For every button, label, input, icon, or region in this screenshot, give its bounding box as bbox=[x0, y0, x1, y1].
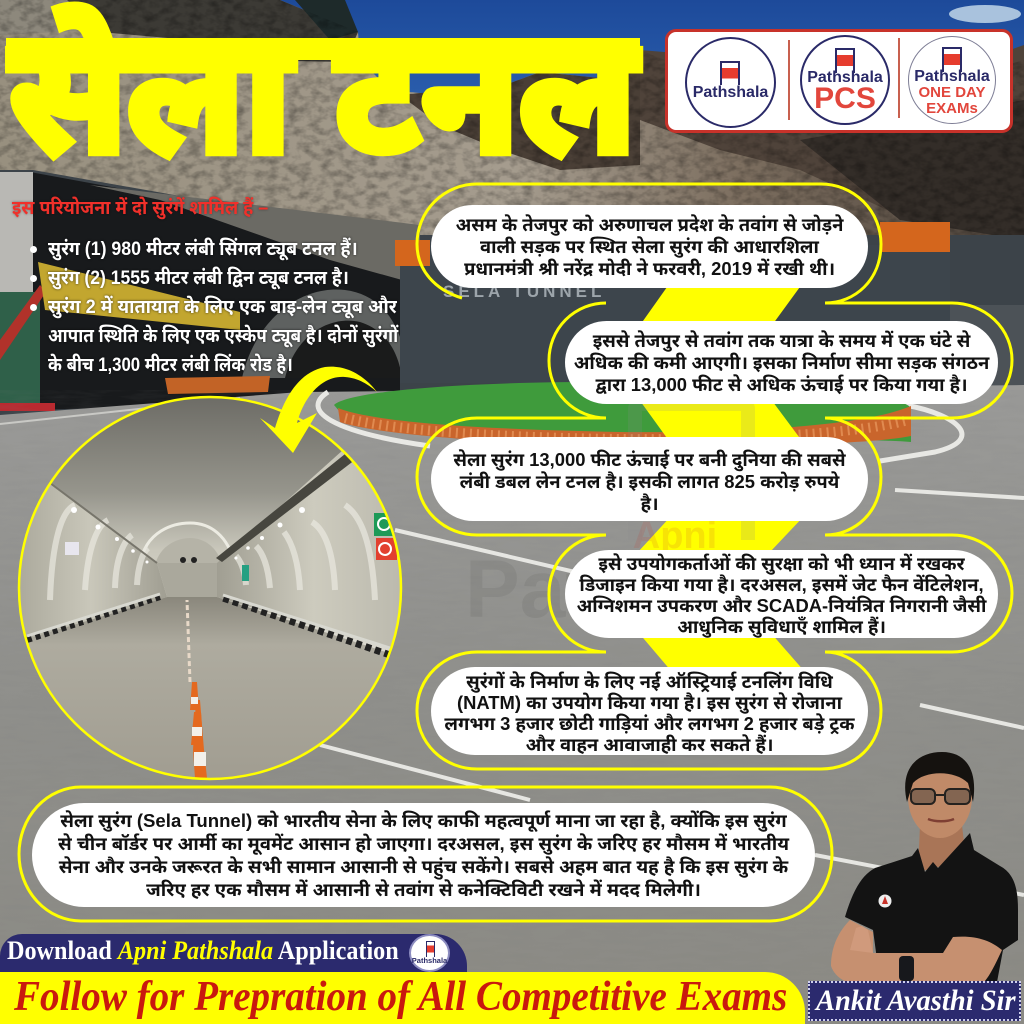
presenter name: Ankit Avasthi Sir bbox=[816, 984, 1016, 1017]
one day exams label: ONE DAY bbox=[919, 84, 985, 101]
one day exams label: EXAMs bbox=[926, 100, 978, 117]
title text: सेला टनल bbox=[10, 6, 636, 187]
bubble 5: (NATM) का उपयोग किया गया है। इस सुरंग से रोजाना bbox=[457, 692, 842, 713]
phone icon bbox=[835, 48, 855, 73]
wordmark: Pathshala bbox=[807, 69, 883, 86]
phone icon bbox=[720, 61, 740, 85]
bullet 3: के बीच 1,300 मीटर लंबी लिंक रोड है। bbox=[48, 354, 293, 376]
sign text on tunnel: SELA TUNNEL bbox=[443, 282, 605, 301]
phone bbox=[426, 941, 435, 957]
divider bbox=[788, 40, 790, 120]
bubble 6: जरिए हर एक मौसम में आसानी से तवांग से कनेक्टिविटी रखने में मदद मिलेगी। bbox=[146, 879, 701, 900]
bubble 6: से चीन बॉर्डर पर आर्मी का मूवमेंट आसान हो जाएगा। दरअसल, इस सुरंग के जरिए हर मौसम में भारतीय bbox=[58, 833, 789, 854]
bubble 3: सेला सुरंग 13,000 फीट ऊंचाई पर बनी दुनिया की सबसे bbox=[453, 449, 846, 470]
follow bar bbox=[0, 972, 805, 1024]
app logo bbox=[409, 934, 450, 972]
bubble 1: असम के तेजपुर को अरुणाचल प्रदेश के तवांग से जोड़ने bbox=[456, 214, 843, 234]
divider bbox=[898, 38, 900, 118]
bubble 2 bbox=[565, 321, 998, 404]
title bbox=[5, 2, 644, 187]
bubble 1: वाली सड़क पर स्थित सेला सुरंग की आधारशिला bbox=[480, 236, 819, 256]
bullet 1: सुरंग (1) 980 मीटर लंबी सिंगल ट्यूब टनल हैं। bbox=[48, 238, 358, 260]
bubble 6 bbox=[32, 803, 815, 907]
bubble 1 bbox=[431, 205, 868, 288]
bubble 5 bbox=[431, 667, 868, 755]
bubble 2: द्वारा 13,000 फीट से अधिक ऊंचाई पर किया गया है। bbox=[596, 374, 967, 394]
one day exams label bbox=[919, 84, 986, 117]
follow text: Follow for Prepration of All Competitive Exams bbox=[14, 974, 787, 1020]
download text: Download Apni Pathshala Application bbox=[7, 936, 399, 965]
bubble 3: है। bbox=[641, 493, 658, 514]
bubble 5: लगभग 3 हजार छोटी गाड़ियां और लगभग 2 हजार बड़े ट्रक bbox=[444, 713, 855, 734]
bubble 3: लंबी डबल लेन टनल है। इसकी लागत 825 करोड़ रुपये bbox=[460, 471, 839, 492]
watermark text: Pathshala bbox=[465, 544, 852, 635]
bubble 1: प्रधानमंत्री श्री नरेंद्र मोदी ने फरवरी, 2019 में रखी थी। bbox=[464, 258, 835, 278]
bubble 4: आधुनिक सुविधाएँ शामिल हैं। bbox=[677, 616, 886, 637]
logo: Pathshala One Day Exams bbox=[908, 36, 996, 124]
bubble 5: सुरंगों के निर्माण के लिए नई ऑस्ट्रियाई टनलिंग विधि bbox=[466, 671, 833, 692]
download application bar bbox=[0, 934, 467, 972]
bubble 4: डिजाइन किया गया है। दरअसल, इसमें जेट फैन वेंटिलेशन, bbox=[579, 574, 984, 595]
wordmark: Pathshala bbox=[914, 68, 990, 85]
bubble 2: अधिक की कमी आएगी। इसका निर्माण सीमा सड़क संगठन bbox=[574, 352, 989, 372]
bubble 4: अग्निशमन उपकरण और SCADA-नियंत्रित निगरानी जैसी bbox=[577, 595, 986, 616]
road bbox=[0, 385, 1024, 1024]
PCS label: PCS bbox=[814, 82, 876, 115]
bullet 3: आपात स्थिति के लिए एक एस्केप ट्यूब है। दोनों सुरंगों bbox=[48, 325, 398, 347]
bubble 4 bbox=[565, 550, 998, 638]
bubble 6: सेना और उनके जरूरत के सभी सामान आसानी से पहुंच सकेंगे। सबसे अहम बात यह है कि इस सुरंग के bbox=[59, 856, 788, 877]
label: Pathshala bbox=[412, 956, 447, 965]
watermark logo bbox=[628, 404, 755, 557]
bubble 5: और वाहन आवाजाही कर सकते हैं। bbox=[526, 734, 773, 755]
bullet 2: सुरंग (2) 1555 मीटर लंबी द्विन ट्यूब टनल है। bbox=[48, 267, 349, 289]
grass traffic island bbox=[318, 382, 962, 461]
logo: Pathshala PCS bbox=[800, 35, 890, 125]
logo panel bbox=[665, 29, 1013, 133]
wordmark: Pathshala bbox=[693, 84, 768, 101]
phone icon bbox=[942, 47, 962, 72]
tunnel portal bbox=[0, 170, 1024, 420]
bubble 6: सेला सुरंग (Sela Tunnel) को भारतीय सेना के लिए काफी महत्वपूर्ण माना जा रहा है, क्योंकि इस सुरंग bbox=[60, 810, 787, 831]
list heading: इस परियोजना में दो सुरंगें शामिल हैं – bbox=[12, 198, 268, 219]
watermark wordmark: Apni bbox=[633, 515, 717, 557]
name plate bbox=[808, 981, 1021, 1021]
bullet 3 bbox=[30, 294, 398, 376]
bubble 3 bbox=[431, 437, 868, 521]
bullet 3: सुरंग 2 में यातायात के लिए एक बाइ-लेन ट्यूब और bbox=[48, 296, 397, 318]
title headline bar bbox=[6, 38, 640, 60]
bubble 2: इससे तेजपुर से तवांग तक यात्रा के समय में एक घंटे से bbox=[593, 330, 970, 350]
tunnel interior photo circle bbox=[18, 396, 402, 780]
watermark phone bbox=[628, 397, 755, 540]
logo: Pathshala bbox=[685, 37, 776, 128]
bubble 4: इसे उपयोगकर्ताओं की सुरक्षा को भी ध्यान में रखकर bbox=[598, 553, 965, 574]
